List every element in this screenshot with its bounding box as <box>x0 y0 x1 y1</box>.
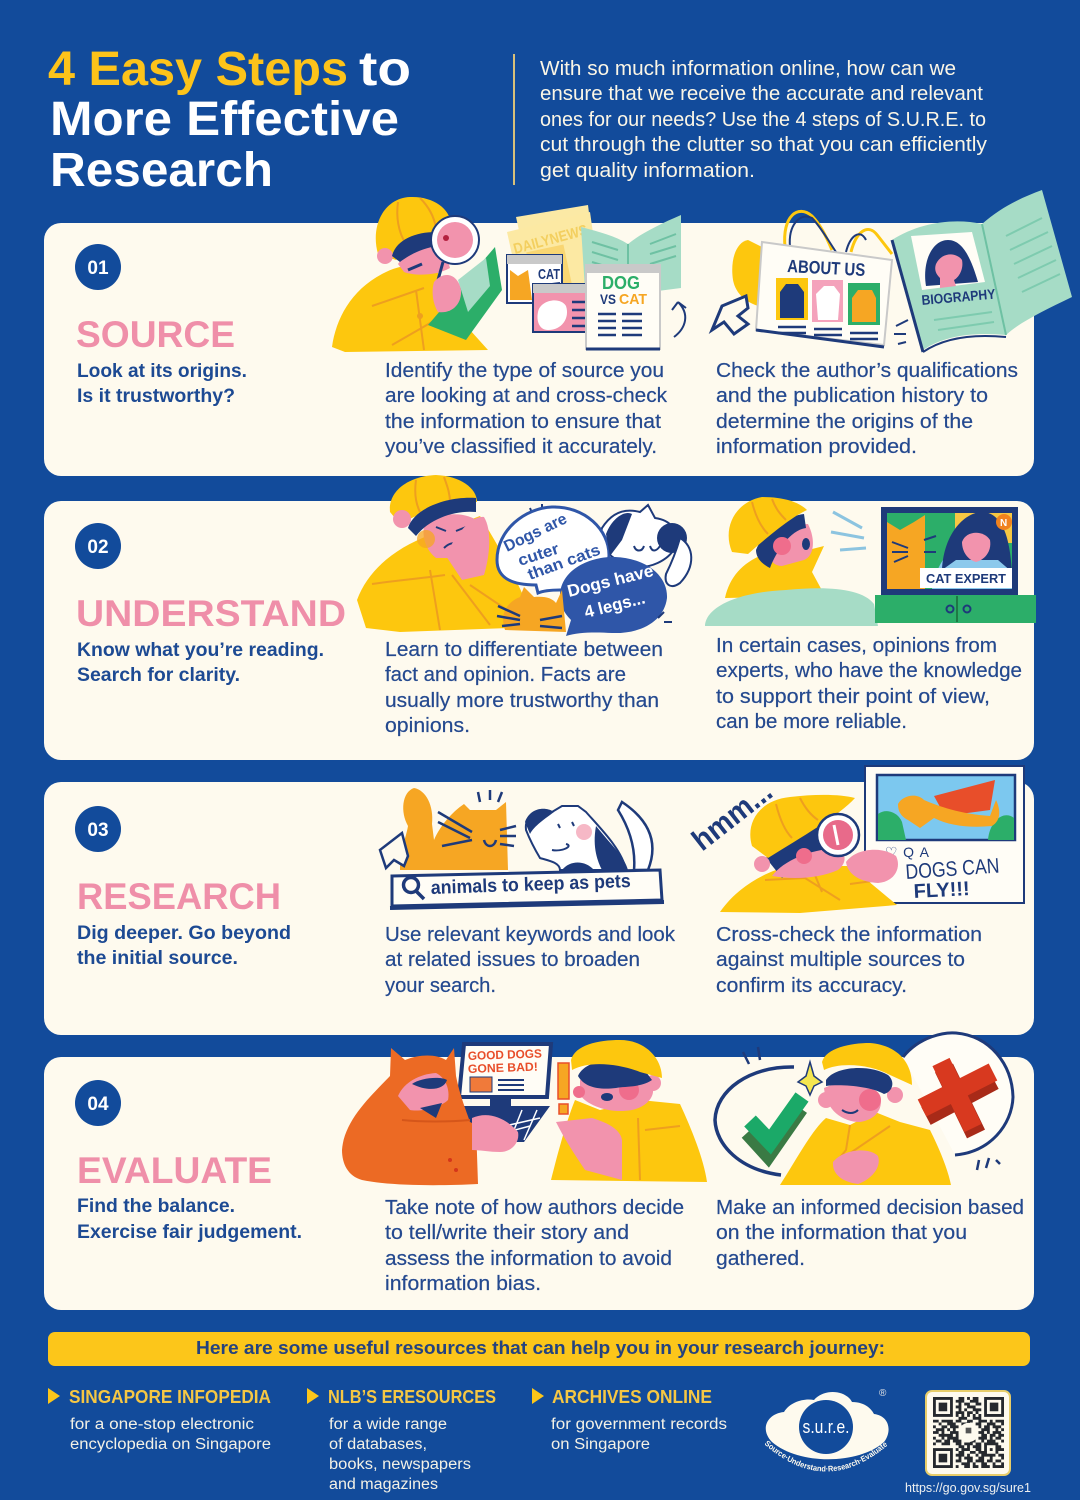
panel: understand <box>44 475 1036 760</box>
intro text: ones for our needs? Use the 4 steps of S.U.R.E. to <box>540 109 986 131</box>
body text: evaluate column 1: Take note of how authors decide <box>385 1197 684 1219</box>
step number 03 <box>75 806 121 852</box>
resource: nlb eresources: for a wide range <box>329 1416 447 1433</box>
illustration: speech bubbles, dog and cat: than cats <box>526 542 603 584</box>
body text: evaluate column 1: information bias. <box>385 1273 541 1295</box>
resource: archives online: ARCHIVES ONLINE <box>552 1387 712 1407</box>
body text: evaluate column 1: assess the information to avoid <box>385 1248 672 1270</box>
title: More Effective <box>50 93 399 146</box>
illustration: speech bubbles, dog and cat: 4 legs... <box>582 588 647 622</box>
resources banner <box>48 1332 1030 1366</box>
resource: nlb eresources <box>307 1387 496 1493</box>
illustration: detective with magnifier and flying dog post <box>686 766 1024 913</box>
body text: understand column 2: can be more reliable. <box>716 711 907 733</box>
tagline: understand <box>77 639 324 686</box>
body text: evaluate column 2 <box>716 1197 1024 1270</box>
resource: nlb eresources: and magazines <box>329 1476 438 1493</box>
body text: source column 1: are looking at and cross-check <box>385 385 668 407</box>
body text: source column 2: determine the origins of the <box>716 411 973 433</box>
heading: evaluate: EVALUATE <box>77 1150 272 1191</box>
body text: source column 1: Identify the type of source you <box>385 360 664 382</box>
tagline: source: Is it trustworthy? <box>77 385 235 407</box>
intro text: cut through the clutter so that you can efficiently <box>540 134 987 156</box>
body text: understand column 2: In certain cases, opinions from <box>716 635 997 657</box>
resource: archives online: on Singapore <box>551 1436 650 1453</box>
body text: understand column 1: Learn to differentiate between <box>385 639 663 661</box>
body text: source column 1: the information to ensure that <box>385 411 661 433</box>
illustration: about us page, cursor and biography book: ABOUT US <box>787 256 866 280</box>
body text: research column 2: against multiple sources to <box>716 949 965 971</box>
body text: evaluate column 1: to tell/write their story and <box>385 1222 629 1244</box>
title: to <box>359 43 411 96</box>
resource: nlb eresources: books, newspapers <box>329 1456 471 1473</box>
step number 01 <box>75 244 121 290</box>
s.u.r.e. logo <box>765 1388 889 1472</box>
illustration: hooded author at computer: GOOD DOGS <box>468 1046 542 1063</box>
step number 04 <box>75 1080 121 1126</box>
body text: understand column 1: usually more trustworthy than <box>385 690 659 712</box>
tagline: source: Look at its origins. <box>77 360 247 382</box>
panel: source <box>44 190 1072 476</box>
body text: understand column 1 <box>385 639 663 737</box>
resource: singapore infopedia <box>48 1387 271 1453</box>
tagline: research: the initial source. <box>77 947 238 969</box>
illustration: hooded author at computer <box>342 1044 551 1185</box>
intro text: With so much information online, how can we <box>540 58 956 80</box>
tagline: understand: Search for clarity. <box>77 664 240 686</box>
tagline: evaluate: Find the balance. <box>77 1195 235 1217</box>
body text: source column 1: you’ve classified it accurately. <box>385 436 657 458</box>
illustration: about us page, cursor and biography book <box>712 190 1072 352</box>
tagline: source <box>77 360 247 407</box>
body text: research column 1: at related issues to broaden <box>385 949 640 971</box>
s.u.r.e. logo: ® <box>879 1388 887 1399</box>
body text: evaluate column 1 <box>385 1197 684 1295</box>
illustration: newspaper, book and browser windows: DAILYNEWS <box>512 222 589 258</box>
step number 02 <box>75 523 121 569</box>
step number 02: 02 <box>87 537 109 558</box>
body text: evaluate column 2: gathered. <box>716 1248 805 1270</box>
body text: research column 2: Cross-check the information <box>716 924 982 946</box>
resource: archives online: for government records <box>551 1416 727 1433</box>
tagline: evaluate: Exercise fair judgement. <box>77 1221 302 1243</box>
illustration: surprised detective pointing <box>551 1040 707 1182</box>
resources banner: Here are some useful resources that can help you in your research journey: <box>196 1337 885 1358</box>
step number 04: 04 <box>87 1094 109 1115</box>
s.u.r.e. logo: Source·Understand·Research·Evaluate <box>765 1440 887 1472</box>
resource: archives online <box>532 1387 727 1453</box>
QR code <box>926 1391 1010 1475</box>
heading: research: RESEARCH <box>77 876 281 917</box>
body text: research column 2: confirm its accuracy. <box>716 975 907 997</box>
body text: research column 1: Use relevant keywords and look <box>385 924 676 946</box>
illustration: speech bubbles, dog and cat <box>497 504 691 636</box>
illustration: newspaper, book and browser windows: CAT <box>619 291 647 308</box>
body text: research column 2 <box>716 924 982 997</box>
tagline: evaluate <box>77 1195 302 1243</box>
illustration: hooded author at computer: GONE BAD! <box>468 1060 538 1076</box>
illustration: about us page, cursor and biography book: BIOGRAPHY <box>921 286 997 308</box>
body text: understand column 2: to support their point of view, <box>716 686 990 708</box>
title: 4 Easy Steps <box>48 43 348 96</box>
body text: source column 2: information provided. <box>716 436 917 458</box>
illustration: thinking detective <box>357 475 535 632</box>
body text: source column 1 <box>385 360 668 458</box>
illustration: detective watching cat expert on TV <box>705 497 1036 626</box>
resource: nlb eresources: of databases, <box>329 1436 427 1453</box>
resource: nlb eresources: NLB’S ERESOURCES <box>328 1387 496 1407</box>
illustration: cat, dog and search bar: animals to keep as pets <box>430 871 631 899</box>
illustration: detective with magnifier and book <box>332 197 502 352</box>
illustration: detective with magnifier and flying dog post: ♡QA <box>885 844 930 860</box>
body text: research column 1: your search. <box>385 975 496 997</box>
panel: research <box>44 766 1034 1035</box>
tagline: research: Dig deeper. Go beyond <box>77 922 291 944</box>
s.u.r.e. logo: s.u.r.e. <box>802 1417 850 1437</box>
body text: source column 2 <box>716 360 1018 458</box>
body text: evaluate column 2: Make an informed decision based <box>716 1197 1024 1219</box>
tagline: research <box>77 922 291 969</box>
step number 03: 03 <box>87 820 109 841</box>
body text: evaluate column 2: on the information that you <box>716 1222 967 1244</box>
tagline: understand: Know what you’re reading. <box>77 639 324 661</box>
intro text <box>540 58 987 182</box>
illustration: cat, dog and search bar <box>380 788 664 908</box>
illustration: detective watching cat expert on TV: CAT EXPERT <box>926 571 1006 586</box>
resource: singapore infopedia: for a one-stop electronic <box>70 1416 254 1433</box>
resource: singapore infopedia: SINGAPORE INFOPEDIA <box>69 1387 271 1407</box>
heading: source: SOURCE <box>76 314 235 355</box>
illustration: newspaper, book and browser windows: DOG <box>602 273 640 293</box>
body text: understand column 1: opinions. <box>385 715 470 737</box>
illustration: speech bubbles, dog and cat: cuter <box>516 541 561 570</box>
intro text: get quality information. <box>540 160 755 182</box>
illustration: speech bubbles, dog and cat: Dogs are <box>501 510 570 556</box>
body text: source column 2: and the publication history to <box>716 385 988 407</box>
body text: research column 1 <box>385 924 676 997</box>
resource: singapore infopedia: encyclopedia on Singapore <box>70 1436 271 1453</box>
illustration: newspaper, book and browser windows <box>507 205 686 349</box>
body text: understand column 2: experts, who have the knowledge <box>716 660 1022 682</box>
illustration: detective watching cat expert on TV: N <box>1000 518 1007 529</box>
illustration: detective with magnifier and flying dog post: DOGS CAN <box>905 854 1000 884</box>
title <box>48 43 411 197</box>
illustration: newspaper, book and browser windows: CAT <box>538 266 560 283</box>
illustration: newspaper, book and browser windows: VS <box>600 291 616 307</box>
body text: understand column 1: fact and opinion. Facts are <box>385 664 626 686</box>
panel: evaluate <box>44 1033 1034 1310</box>
body text: source column 2: Check the author’s qualifications <box>716 360 1018 382</box>
illustration: speech bubbles, dog and cat: Dogs have <box>565 561 655 601</box>
QR url: https://go.gov.sg/sure1 <box>905 1481 1031 1495</box>
body text: understand column 2 <box>716 635 1022 733</box>
step number 01: 01 <box>87 258 109 279</box>
heading: understand: UNDERSTAND <box>76 593 346 634</box>
illustration: detective with magnifier and flying dog post: FLY!!! <box>913 878 970 903</box>
illustration: detective with magnifier and flying dog post: hmm... <box>686 775 779 858</box>
intro text: ensure that we receive the accurate and relevant <box>540 83 983 105</box>
title: Research <box>50 144 273 197</box>
illustration: decision with check and cross <box>715 1033 1013 1185</box>
